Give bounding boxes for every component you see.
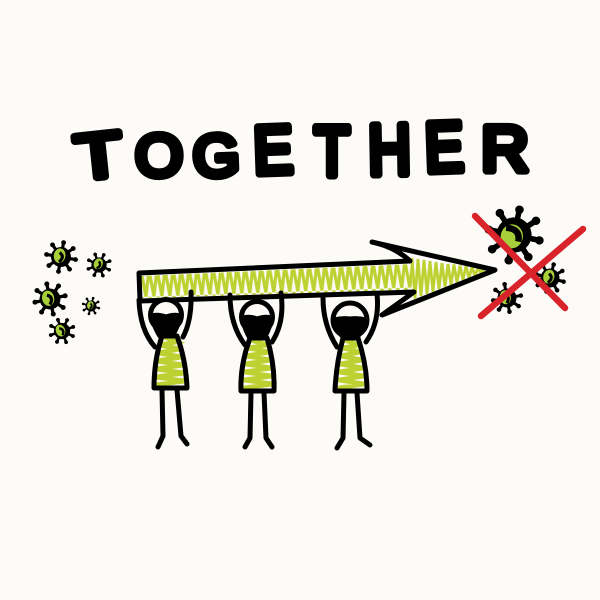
virus 5 <box>47 316 77 346</box>
title: R <box>481 113 529 185</box>
title: G <box>192 122 241 190</box>
arrow outline <box>139 242 495 315</box>
virus right <box>533 261 567 295</box>
title: O <box>135 122 183 189</box>
virus 4 <box>81 296 101 316</box>
large virus <box>483 204 545 266</box>
virus 3 <box>32 281 68 317</box>
person 3 <box>323 294 378 448</box>
virus lower <box>491 282 523 314</box>
virus 2 <box>84 250 114 280</box>
red cross <box>475 216 583 316</box>
arrow zigzag fill <box>141 258 484 298</box>
title: H <box>368 110 412 190</box>
person 1 <box>139 292 191 447</box>
virus 1 <box>44 240 78 274</box>
person 2 <box>230 293 282 447</box>
title <box>72 107 529 193</box>
title: T <box>314 112 350 190</box>
crossed-out viruses <box>475 204 583 316</box>
title: E <box>423 107 465 187</box>
arrow <box>139 242 495 315</box>
title: T <box>72 118 126 193</box>
title: E <box>252 113 294 189</box>
